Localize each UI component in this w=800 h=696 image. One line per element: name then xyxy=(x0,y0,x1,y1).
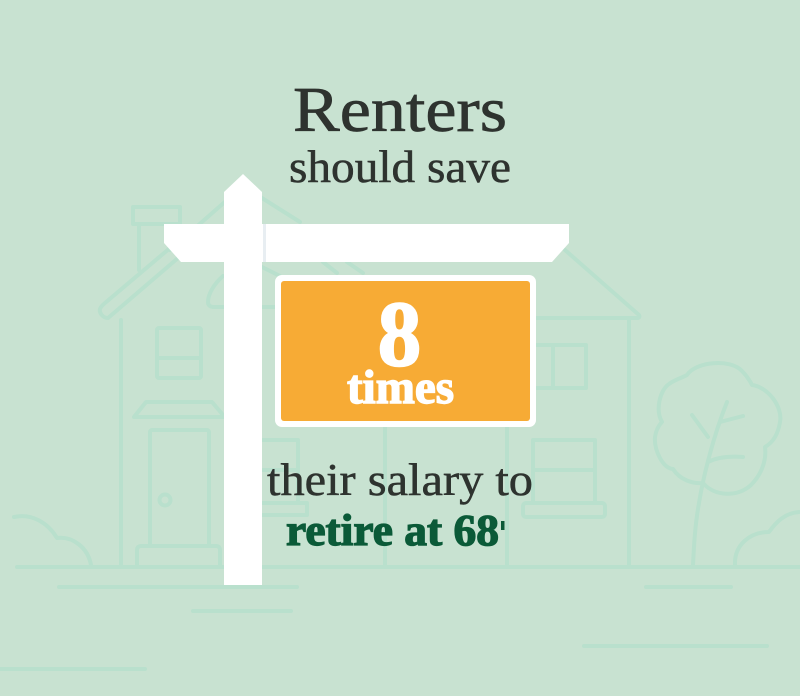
subheading: should save: should save xyxy=(289,142,511,192)
upper left window xyxy=(157,328,201,378)
closing text xyxy=(267,455,533,555)
house outline xyxy=(100,186,639,567)
upper right window xyxy=(537,345,586,388)
door xyxy=(150,430,209,545)
crossbar xyxy=(164,224,569,262)
door step xyxy=(137,546,220,566)
vertical post xyxy=(224,174,262,585)
lower right window xyxy=(523,440,605,517)
their salary to: their salary to xyxy=(267,455,533,505)
sign post xyxy=(164,174,569,585)
chimney xyxy=(133,207,180,270)
times label: times xyxy=(347,361,454,414)
retire at 68: retire at 68 xyxy=(286,506,499,555)
porch roof xyxy=(134,402,224,417)
hanging sign xyxy=(275,275,536,427)
title xyxy=(289,74,511,192)
footnote marker xyxy=(501,521,504,530)
right bush xyxy=(735,512,799,565)
big number: 8 xyxy=(378,283,421,385)
left bush xyxy=(14,516,91,565)
heading: Renters: Renters xyxy=(293,74,507,145)
ground lines xyxy=(0,567,800,669)
lower middle window xyxy=(263,440,307,515)
background illustration: house, tree, bushes and ground xyxy=(0,186,800,669)
tree xyxy=(655,363,780,565)
